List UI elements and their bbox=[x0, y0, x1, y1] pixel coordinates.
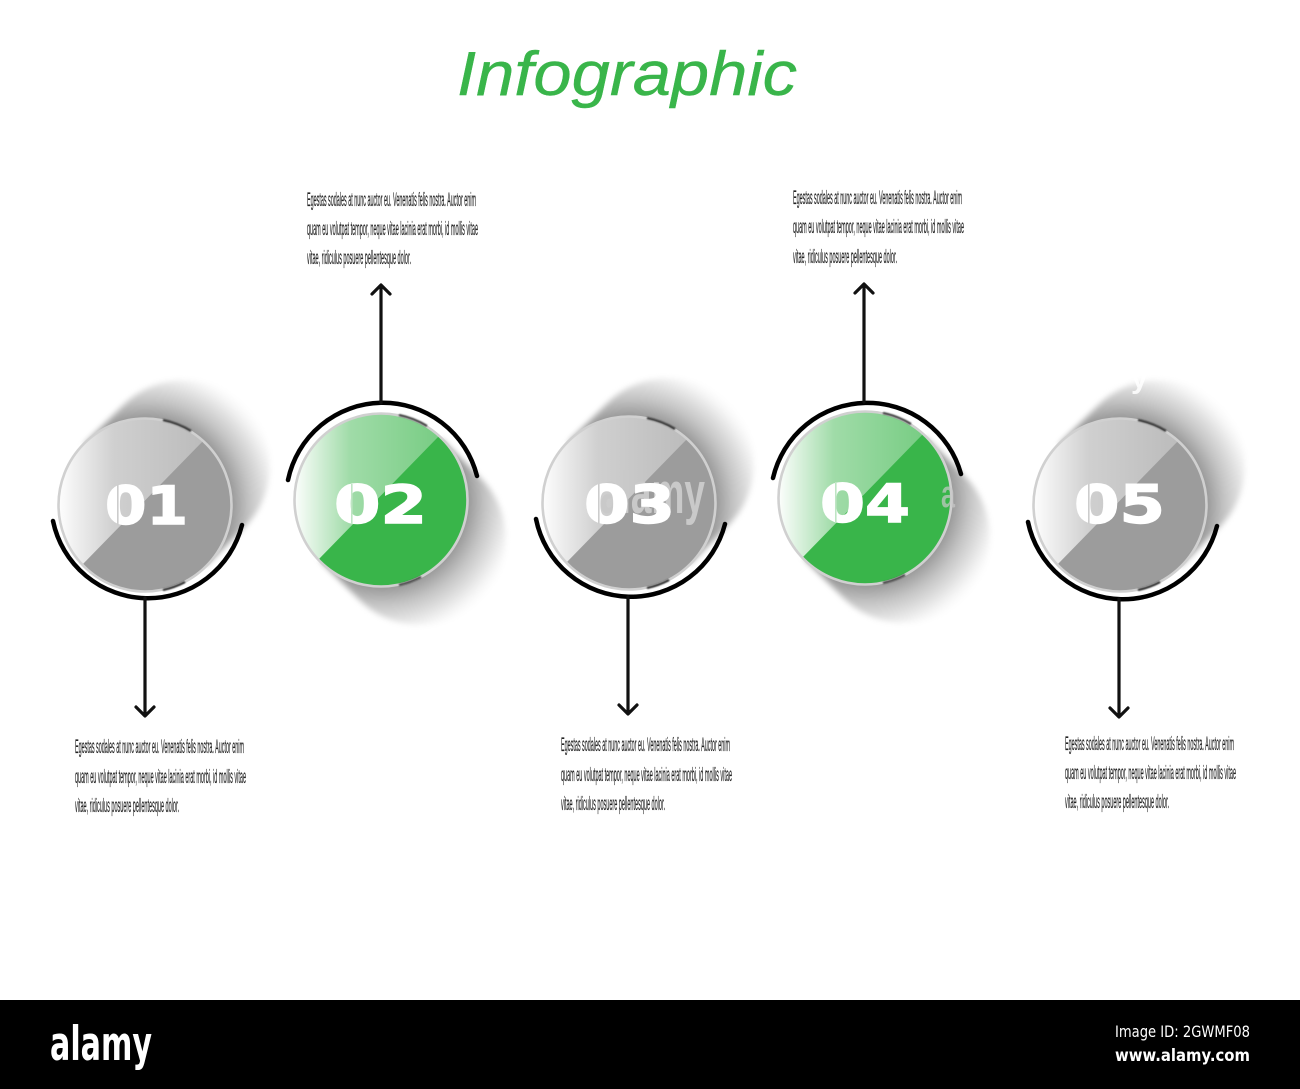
step 05 bbox=[1026, 380, 1245, 812]
shadow 03 bbox=[568, 342, 790, 564]
badge 01: 01 bbox=[105, 476, 188, 537]
step 03: vitae, ridiculus posuere pellentesque dolor. bbox=[561, 794, 665, 815]
bracket arc 01 bbox=[53, 521, 242, 598]
text block 02 bbox=[307, 190, 478, 269]
infographic canvas: quam eu volutpat tempor, neque vitae lacinia erat morbi, id mollis vitae bbox=[307, 219, 478, 240]
infographic canvas: Egestas sodales at nunc auctor eu. Venenatis felis nostra. Auctor enim bbox=[75, 737, 244, 758]
badge 01 bbox=[57, 417, 233, 593]
bracket arc 02 bbox=[288, 403, 477, 480]
infographic canvas: quam eu volutpat tempor, neque vitae lacinia erat morbi, id mollis vitae bbox=[75, 767, 246, 788]
shadow 02 bbox=[320, 439, 542, 661]
arrow 01 bbox=[136, 598, 154, 716]
badge 03: 03 bbox=[584, 475, 675, 536]
badge 03 bbox=[541, 415, 717, 591]
badge 04: a bbox=[941, 474, 956, 516]
step 02 bbox=[261, 190, 542, 661]
infographic canvas: quam eu volutpat tempor, neque vitae lacinia erat morbi, id mollis vitae bbox=[561, 765, 732, 786]
arrow 03 bbox=[619, 597, 637, 714]
website: www.alamy.com bbox=[1115, 1046, 1250, 1066]
shadow 05 bbox=[1059, 344, 1281, 566]
footer logo: alamy bbox=[50, 1017, 152, 1072]
step 04: vitae, ridiculus posuere pellentesque dolor. bbox=[793, 247, 897, 268]
badge 02: 02 bbox=[334, 475, 427, 536]
infographic canvas: Egestas sodales at nunc auctor eu. Venenatis felis nostra. Auctor enim bbox=[561, 735, 730, 756]
arrow 04 bbox=[855, 284, 873, 402]
badge 04 bbox=[777, 410, 956, 586]
shadow 04 bbox=[804, 437, 1026, 659]
step 01 bbox=[25, 344, 306, 817]
step 01: vitae, ridiculus posuere pellentesque dolor. bbox=[75, 796, 179, 817]
infographic canvas: Egestas sodales at nunc auctor eu. Venenatis felis nostra. Auctor enim bbox=[307, 190, 476, 211]
badge 04: 04 bbox=[820, 474, 910, 535]
badge 05: 05 bbox=[1074, 475, 1165, 536]
bracket arc 04 bbox=[773, 403, 961, 478]
footer bar bbox=[0, 1000, 1300, 1089]
step 03 bbox=[509, 342, 790, 815]
bracket arc 05 bbox=[1028, 522, 1217, 599]
arrow 02 bbox=[372, 285, 390, 403]
badge 05 bbox=[1032, 417, 1208, 593]
text block 01 bbox=[75, 737, 246, 817]
title: Infographic bbox=[457, 40, 797, 109]
bracket arc 03 bbox=[536, 519, 725, 597]
badge 02 bbox=[293, 412, 469, 588]
shadow 01 bbox=[84, 344, 306, 566]
watermark ghost over shadow 05: y bbox=[1131, 362, 1148, 395]
text block 04 bbox=[793, 188, 964, 268]
arrow 05 bbox=[1110, 599, 1128, 717]
text block 03 bbox=[561, 735, 732, 815]
image id: Image ID: 2GWMF08 bbox=[1115, 1022, 1250, 1041]
badge 03: alamy bbox=[600, 461, 705, 526]
text block 05 bbox=[1065, 734, 1236, 813]
step 02: vitae, ridiculus posuere pellentesque dolor. bbox=[307, 248, 411, 269]
step 04 bbox=[770, 190, 990, 623]
